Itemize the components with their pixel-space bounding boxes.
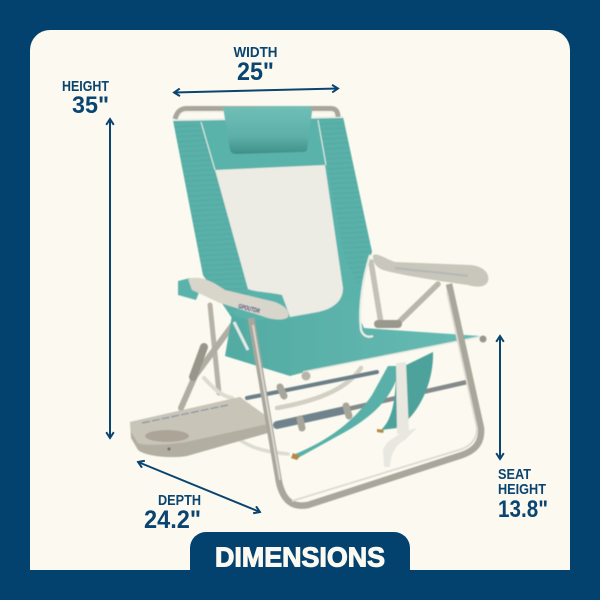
width label: WIDTH	[234, 44, 278, 61]
width value: 25"	[237, 58, 274, 86]
front tube frame	[251, 284, 481, 506]
seat height arrow	[499, 336, 501, 459]
right armrest	[373, 255, 488, 287]
backrest	[173, 117, 372, 360]
tab title: DIMENSIONS	[215, 542, 385, 572]
chair illustration	[130, 106, 488, 506]
seat height value: 13.8"	[498, 496, 548, 523]
armrest brand label: GPOUTDR	[238, 303, 261, 315]
seat	[225, 300, 480, 376]
headrest pillow	[223, 106, 312, 154]
mesh panel	[215, 165, 343, 317]
rear legs and lower frame	[181, 262, 467, 454]
seat height dimension	[498, 336, 548, 523]
dimensions tab	[190, 532, 410, 572]
top bar of frame	[175, 108, 338, 119]
height dimension	[62, 78, 110, 438]
depth dimension	[138, 462, 260, 534]
width arrow	[174, 88, 338, 92]
width dimension	[174, 44, 338, 92]
height value: 35"	[72, 92, 109, 119]
tray with cup holder	[130, 397, 269, 457]
depth label: DEPTH	[158, 492, 201, 509]
straps under seat	[293, 366, 400, 459]
seat height dimension: HEIGHT	[498, 481, 546, 498]
left armrest	[178, 278, 288, 320]
depth value: 24.2"	[144, 506, 201, 534]
depth arrow	[138, 462, 260, 512]
seat height label: SEAT	[498, 466, 531, 483]
height arrow	[109, 119, 111, 438]
height label: HEIGHT	[62, 78, 109, 95]
